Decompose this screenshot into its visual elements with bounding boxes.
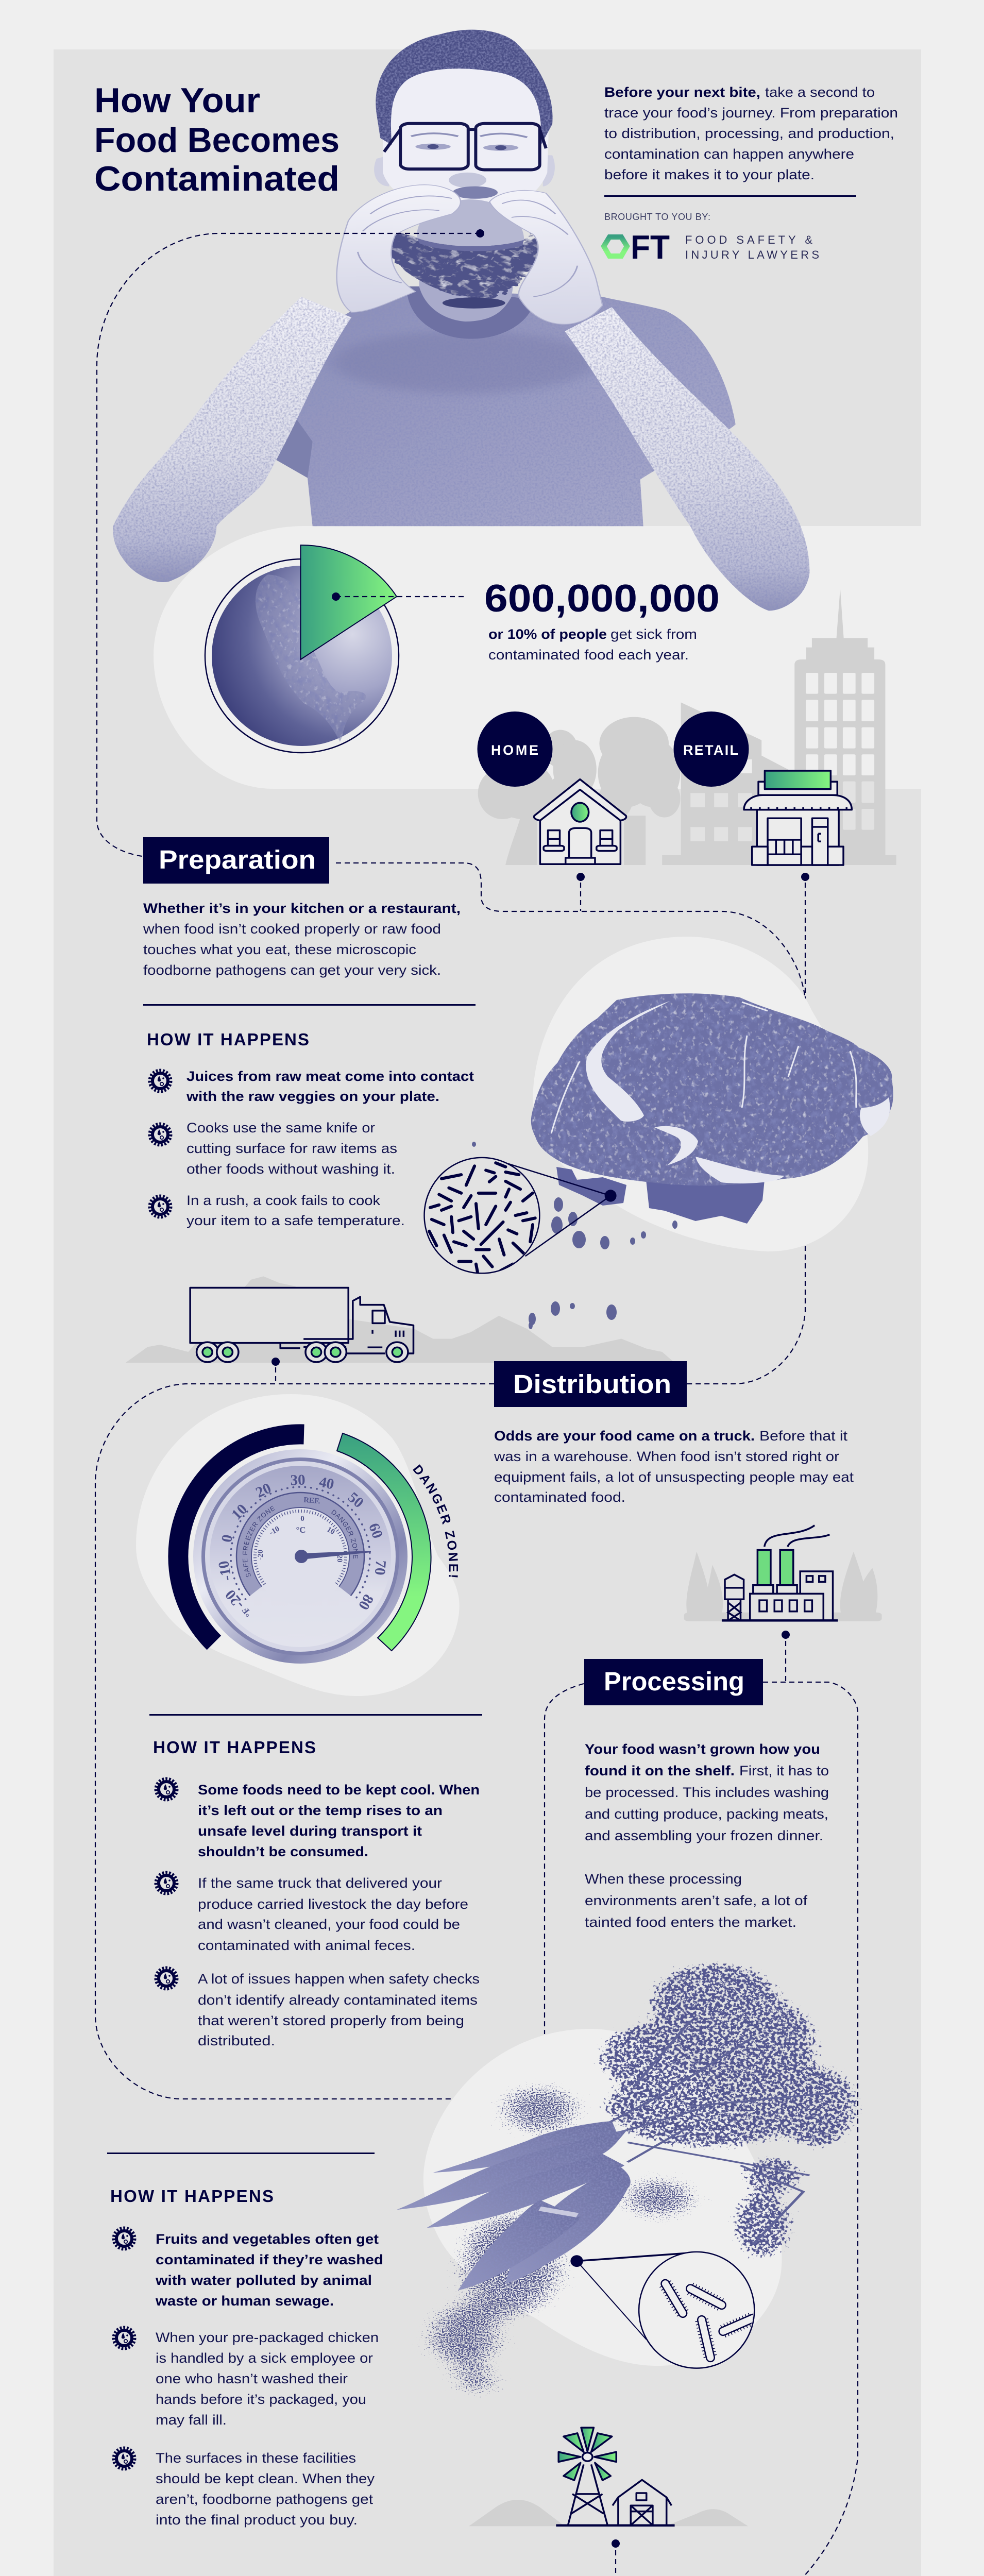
- background blob behind carrots: [423, 2029, 782, 2366]
- man: face: [383, 62, 549, 217]
- pie slice 10 percent: [301, 545, 397, 659]
- thermometer dial: DANGER ZONE: [331, 1510, 358, 1559]
- section label: Processing: Processing: [604, 1667, 744, 1696]
- icon: truck: [190, 1287, 413, 1362]
- raw meat: [531, 993, 893, 1185]
- how it happens 1 text: your item to a safe temperature.: [186, 1213, 405, 1228]
- man: collar: [406, 286, 533, 339]
- dial numbers celsius: REF.: [303, 1496, 320, 1505]
- dot: burger: [476, 229, 484, 238]
- distribution text: [494, 1428, 854, 1505]
- man: right fingers: [502, 200, 578, 297]
- intro text: to distribution, processing, and production,: [604, 126, 894, 141]
- section label: Distribution: Distribution: [513, 1369, 671, 1399]
- how it happens 3 text: into the final product you buy.: [156, 2512, 358, 2528]
- how it happens 2 text: don’t identify already contaminated items: [198, 1992, 478, 2008]
- intro text: take a second to: [765, 84, 875, 100]
- dial face: [210, 1466, 391, 1647]
- logo: top: [604, 228, 819, 266]
- meat thin marbling: [551, 1002, 856, 1133]
- man: shirt: [262, 290, 736, 526]
- barn: [613, 2480, 671, 2525]
- dot: factory: [782, 1631, 790, 1639]
- globe with pie slice: [205, 545, 399, 753]
- dial needle: [301, 1551, 371, 1560]
- heading: how it happens 1: HOW IT HAPPENS: [147, 1030, 309, 1049]
- magnifier: bacteria on carrots: [570, 2252, 754, 2368]
- man: bun underside: [417, 238, 524, 251]
- badge: retail: [674, 711, 749, 787]
- carrots illustration: [397, 1962, 860, 2399]
- dial numbers fahrenheit: -10: [215, 1560, 235, 1582]
- windmill blades: [558, 2428, 616, 2480]
- thermometer dial: SAFE FREEZER ZONE: [243, 1505, 275, 1578]
- background blob behind globe: [154, 526, 921, 789]
- intro text: Before your next bite,: [604, 84, 760, 100]
- processing text: be processed. This includes washing: [585, 1785, 829, 1800]
- how it happens 3 text: should be kept clean. When they: [156, 2471, 375, 2486]
- icon: factory: [684, 1526, 882, 1622]
- arc: danger zone: [337, 1433, 431, 1651]
- background blob behind meat: [533, 937, 868, 1251]
- preparation text: touches what you eat, these microscopic: [143, 942, 416, 957]
- dial numbers fahrenheit: °F: [240, 1605, 254, 1619]
- magnifier: bacteria on meat: [425, 1158, 617, 1273]
- stat caption: or 10% of people: [488, 626, 607, 642]
- section label: Preparation: [143, 837, 329, 884]
- man: glasses: [384, 124, 546, 170]
- factory smoke: [765, 1526, 829, 1547]
- stat caption: [488, 626, 697, 663]
- preparation text: [143, 901, 461, 978]
- how it happens 2 text: If the same truck that delivered your: [198, 1875, 442, 1891]
- magnifier anchor dot: [605, 1190, 617, 1202]
- how it happens 1 text: Juices from raw meat come into contact: [186, 1069, 474, 1084]
- dial tick dots: [231, 1487, 370, 1599]
- heading: how it happens 2: HOW IT HAPPENS: [153, 1738, 316, 1757]
- man: left sleeve shadow: [262, 404, 313, 478]
- thermometer dial: [193, 1449, 408, 1664]
- processing text: and assembling your frozen dinner.: [585, 1828, 823, 1843]
- how it happens 2 text: shouldn’t be consumed.: [198, 1844, 368, 1859]
- gear bullets 1: [150, 1071, 171, 1217]
- how it happens 2 text: and wasn’t cleaned, your food could be: [198, 1917, 460, 1932]
- how it happens 2 text: unsafe level during transport it: [198, 1823, 422, 1839]
- title: How Your: [94, 81, 260, 120]
- dashed: home connector: [580, 883, 581, 911]
- badge: home: [477, 711, 552, 787]
- dashed path: processing to production: [333, 1682, 858, 2576]
- man: shirt shadow: [333, 331, 596, 393]
- dashed path: burger to preparation: [97, 233, 480, 856]
- how it happens 3 text: waste or human sewage.: [155, 2293, 334, 2309]
- dot: windmill: [612, 2539, 620, 2548]
- man: nose shadow: [449, 173, 486, 188]
- how it happens 3 text: with water polluted by animal: [155, 2273, 372, 2288]
- dashed leader from globe: [336, 596, 464, 597]
- dial numbers fahrenheit: 10: [228, 1501, 250, 1523]
- title: Food Becomes: [94, 121, 340, 160]
- dot: globe: [332, 592, 340, 601]
- globe ring: [205, 559, 399, 753]
- processing text: found it on the shelf.: [585, 1763, 735, 1778]
- man: left arm: [113, 297, 351, 582]
- how it happens 1 text: [186, 1069, 474, 1228]
- dashed: windmill connector: [615, 2550, 616, 2576]
- dot: truck: [272, 1358, 280, 1366]
- preparation text: foodborne pathogens can get your very sick.: [143, 962, 441, 978]
- how it happens 2 text: produce carried livestock the day before: [198, 1896, 468, 1912]
- bacteria: [665, 2284, 753, 2358]
- processing text: [585, 1741, 829, 1930]
- dial zone band: [244, 1500, 357, 1591]
- dot: home: [576, 873, 585, 881]
- how it happens 2 text: A lot of issues happen when safety checks: [198, 1971, 480, 1987]
- dial numbers fahrenheit: 70: [371, 1560, 389, 1576]
- processing text: tainted food enters the market.: [585, 1914, 796, 1930]
- intro text: [604, 84, 898, 182]
- man: left fingers: [358, 196, 452, 283]
- title: [94, 81, 340, 198]
- zone labels on dial: [247, 1506, 284, 1577]
- how it happens 2 text: Some foods need to be kept cool. When: [198, 1782, 480, 1798]
- dashed path: distribution to carrots: [95, 1384, 494, 2099]
- section label: Preparation: Preparation: [159, 845, 316, 874]
- label: danger zone: DANGER ZONE!: [413, 1464, 459, 1578]
- man: right arm: [565, 307, 809, 611]
- gear bullets 2: [156, 1779, 177, 1989]
- distribution text: was in a warehouse. When food isn’t stored right or: [494, 1449, 839, 1464]
- background blob behind thermometer: [136, 1394, 460, 1696]
- intro text: trace your food’s journey. From preparation: [604, 105, 898, 121]
- skyscraper windows: [738, 673, 874, 775]
- dial numbers fahrenheit: 30: [290, 1472, 306, 1488]
- distribution text: Before that it: [759, 1428, 848, 1444]
- windmill tower: [568, 2464, 607, 2525]
- dial numbers celsius: -10: [268, 1525, 281, 1537]
- dial numbers celsius: 20: [335, 1555, 344, 1562]
- processing text: environments aren’t safe, a lot of: [585, 1893, 808, 1908]
- dial numbers celsius: 0: [300, 1515, 304, 1523]
- factory ground line: [722, 1619, 838, 1622]
- icon: retail store: [744, 771, 852, 865]
- how it happens 2 text: that weren’t stored properly from being: [198, 2013, 464, 2028]
- hills: [469, 2500, 748, 2526]
- how it happens 2 text: it’s left out or the temp rises to an: [198, 1803, 443, 1818]
- trees: [478, 717, 681, 865]
- dot: retail: [801, 873, 809, 881]
- how it happens 3 text: [155, 2231, 383, 2528]
- dial numbers fahrenheit: 40: [317, 1473, 335, 1493]
- preparation text: Whether it’s in your kitchen or a restaurant,: [143, 901, 461, 916]
- logo FT: FT: [631, 228, 670, 266]
- how it happens 3 text: When your pre-packaged chicken: [156, 2330, 379, 2345]
- intro text: before it makes it to your plate.: [604, 167, 815, 182]
- carrot stems: [602, 2021, 828, 2244]
- dial numbers fahrenheit: -20: [222, 1586, 247, 1612]
- dial numbers fahrenheit: 20: [253, 1480, 274, 1501]
- icon: house: [534, 779, 626, 864]
- dashed path: preparation to meat: [336, 863, 805, 999]
- distribution text: contaminated food.: [494, 1489, 625, 1505]
- mountains behind truck: [126, 1276, 675, 1363]
- logo wordmark: FOOD SAFETY &: [685, 233, 812, 246]
- dashed: truck connector: [275, 1367, 276, 1384]
- how it happens 1 text: In a rush, a cook fails to cook: [186, 1193, 381, 1208]
- badge: home: HOME: [491, 742, 538, 758]
- brought to you by: top: BROUGHT TO YOU BY:: [604, 212, 710, 222]
- how it happens 3 text: The surfaces in these facilities: [156, 2450, 356, 2466]
- title: Contaminated: [94, 159, 340, 198]
- processing text: and cutting produce, packing meats,: [585, 1806, 828, 1822]
- dashed: factory connector: [785, 1641, 786, 1682]
- stat caption: contaminated food each year.: [488, 647, 689, 663]
- processing text: First, it has to: [739, 1763, 829, 1778]
- dial numbers fahrenheit: 80: [355, 1591, 377, 1613]
- magnifier anchor dot: [570, 2255, 583, 2267]
- hero: man eating burger: [113, 30, 809, 611]
- factory top box: [800, 1571, 833, 1621]
- man: moustache: [452, 187, 498, 199]
- man: lettuce: [383, 228, 543, 299]
- carrots: [397, 2121, 631, 2290]
- how it happens 3 text: hands before it’s packaged, you: [156, 2392, 366, 2407]
- windmill ground line: [556, 2524, 675, 2527]
- processing text: Your food wasn’t grown how you: [585, 1741, 820, 1757]
- man: hair: [376, 30, 553, 145]
- dial numbers fahrenheit: [215, 1472, 389, 1619]
- logo hexagon: [604, 237, 627, 256]
- stat caption: get sick from: [610, 626, 697, 642]
- dial numbers celsius: [257, 1496, 344, 1562]
- dashed path: processing left loop: [545, 1684, 584, 2034]
- how it happens 1 text: cutting surface for raw items as: [186, 1141, 397, 1156]
- dial numbers fahrenheit: 50: [345, 1489, 367, 1511]
- man: right hand: [489, 191, 602, 324]
- how it happens 3 text: Fruits and vegetables often get: [156, 2231, 379, 2247]
- globe: [212, 566, 392, 746]
- how it happens 3 text: one who hasn’t washed their: [156, 2371, 348, 2386]
- dashed: retail connector: [805, 883, 806, 1002]
- dial numbers celsius: -20: [257, 1550, 265, 1560]
- gear bullets 3: [114, 2228, 134, 2469]
- stat number: 600,000,000: [484, 577, 720, 620]
- how it happens 3 text: may fall ill.: [156, 2412, 227, 2428]
- logo wordmark: [685, 233, 819, 261]
- distribution text: Odds are your food came on a truck.: [494, 1428, 755, 1444]
- section label: Processing: [584, 1659, 763, 1705]
- arc: safe zone: [178, 1434, 304, 1643]
- juice droplets: [472, 1142, 677, 1329]
- intro text: contamination can happen anywhere: [604, 146, 854, 162]
- carrot band: [538, 2207, 579, 2217]
- distribution text: equipment fails, a lot of unsuspecting people may eat: [494, 1469, 854, 1485]
- how it happens 3 text: is handled by a sick employee or: [156, 2350, 373, 2366]
- soil splatter: [420, 2081, 703, 2399]
- man: bun: [417, 199, 524, 246]
- dial numbers celsius: °C: [296, 1525, 306, 1535]
- dial numbers fahrenheit: 0: [218, 1533, 236, 1544]
- bacteria rods: [429, 1163, 535, 1272]
- skyscraper: [794, 588, 896, 865]
- globe land: [256, 574, 366, 742]
- water tower: [725, 1574, 744, 1621]
- meat juice puddles: [556, 1167, 765, 1224]
- dial numbers fahrenheit: 60: [365, 1521, 386, 1540]
- how it happens 1 text: other foods without washing it.: [186, 1161, 395, 1177]
- how it happens 2 text: [198, 1782, 480, 2048]
- badge: retail: RETAIL: [683, 742, 738, 758]
- how it happens 1 text: with the raw veggies on your plate.: [186, 1089, 439, 1104]
- section label: Distribution: [494, 1361, 687, 1407]
- heading: how it happens 3: HOW IT HAPPENS: [110, 2187, 274, 2206]
- factory background crops: [684, 1552, 882, 1621]
- carrot foliage: [596, 1962, 860, 2259]
- low building: [662, 702, 794, 865]
- preparation text: when food isn’t cooked properly or raw food: [143, 921, 441, 937]
- man: eyes: [411, 133, 527, 151]
- meat fat streaks: [586, 1001, 890, 1183]
- man: neck: [419, 276, 515, 321]
- icon: windmill and barn: [469, 2428, 748, 2527]
- man: left hand: [337, 185, 461, 312]
- factory chimneys: [757, 1550, 771, 1585]
- skyline silhouette: [478, 588, 896, 865]
- how it happens 3 text: aren’t, foodborne pathogens get: [156, 2492, 374, 2507]
- man: beard: [443, 297, 505, 309]
- how it happens 3 text: contaminated if they’re washed: [156, 2252, 383, 2267]
- dial bezel: [193, 1449, 408, 1664]
- dial numbers celsius: 10: [326, 1526, 336, 1536]
- processing text: When these processing: [585, 1871, 742, 1887]
- how it happens 1 text: Cooks use the same knife or: [186, 1120, 375, 1136]
- how it happens 2 text: contaminated with animal feces.: [198, 1938, 415, 1953]
- lower windows: [690, 782, 874, 841]
- how it happens 2 text: distributed.: [198, 2033, 275, 2048]
- logo wordmark: INJURY LAWYERS: [685, 248, 819, 261]
- dashed path: meat to distribution: [687, 1246, 805, 1384]
- man: ears: [374, 155, 555, 187]
- factory building: [750, 1594, 823, 1621]
